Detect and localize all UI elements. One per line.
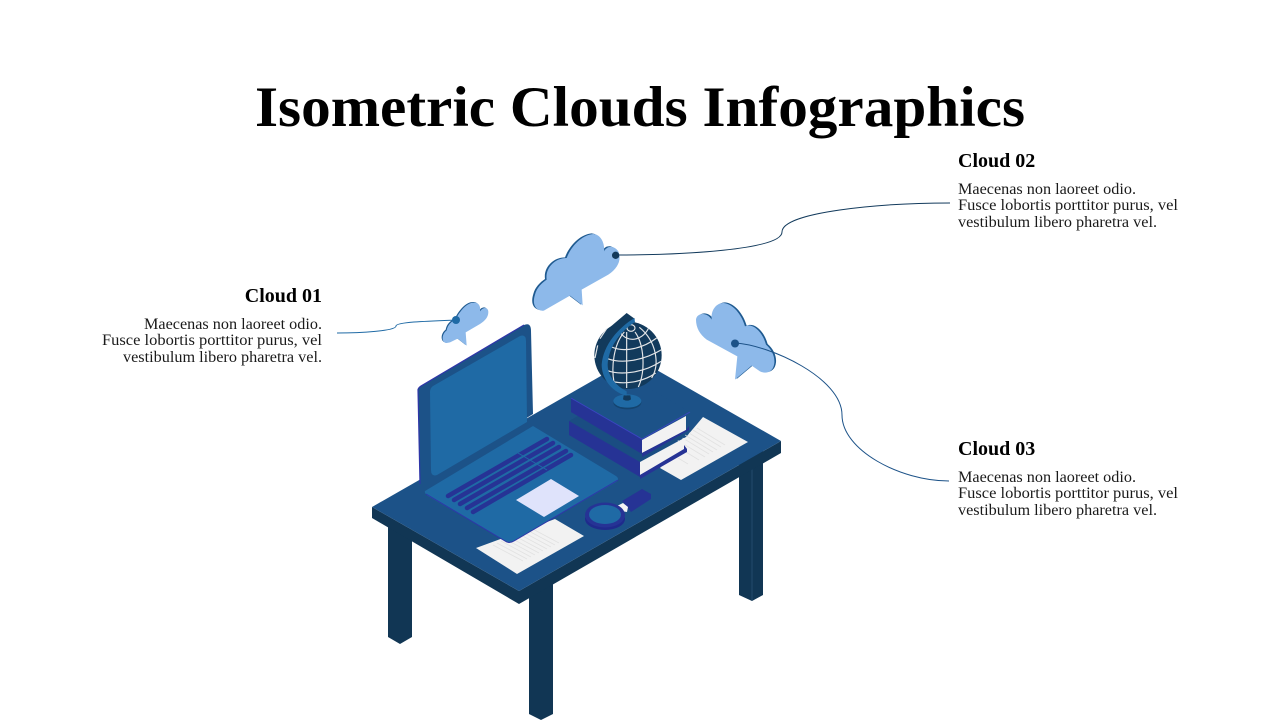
books (569, 371, 690, 479)
magnifier (585, 489, 651, 530)
text block: cloud 01: Fusce lobortis porttitor purus, vel (102, 332, 322, 349)
text block: cloud 03: Maecenas non laoreet odio. (958, 469, 1136, 486)
touchpad (516, 479, 579, 517)
desk left leg (388, 518, 412, 644)
desk front leg (529, 580, 553, 720)
text block: cloud 03: vestibulum libero pharetra vel. (958, 502, 1157, 519)
text block: cloud 03: Cloud 03 (958, 438, 1035, 460)
globe (594, 313, 662, 409)
laptop base (425, 426, 618, 542)
text block: cloud 01 (102, 285, 322, 366)
cloud 2 (532, 233, 620, 311)
text block: cloud 01: vestibulum libero pharetra vel. (123, 349, 322, 366)
desk top (372, 357, 781, 591)
title: Isometric Clouds Infographics (255, 76, 1025, 139)
text block: cloud 02: Cloud 02 (958, 150, 1035, 172)
text block: cloud 02: vestibulum libero pharetra vel. (958, 214, 1157, 231)
upper book (571, 371, 690, 457)
text block: cloud 03 (958, 438, 1178, 519)
text block: cloud 03: Fusce lobortis porttitor purus, vel (958, 485, 1178, 502)
cloud 3 (696, 302, 776, 380)
keyboard (448, 439, 571, 512)
laptop (418, 324, 618, 542)
text block: cloud 02: Maecenas non laoreet odio. (958, 181, 1136, 198)
laptop screen (418, 324, 533, 484)
globe grid (595, 325, 662, 388)
magnifier handle (622, 489, 651, 512)
connector: cloud 1 (337, 320, 456, 333)
connector: cloud 2 (616, 203, 950, 255)
desk back right leg (739, 448, 763, 601)
lower book (569, 394, 687, 479)
globe stand arc (602, 318, 635, 396)
globe sphere (594, 313, 662, 389)
desk side edge (372, 441, 781, 604)
paper: right (660, 417, 748, 480)
magnifier lens (585, 508, 625, 530)
globe base (613, 394, 641, 409)
text block: cloud 02 (958, 150, 1178, 231)
text block: cloud 01: Cloud 01 (245, 285, 322, 307)
text block: cloud 01: Maecenas non laoreet odio. (144, 316, 322, 333)
text block: cloud 02: Fusce lobortis porttitor purus, vel (958, 197, 1178, 214)
desk (372, 357, 781, 720)
paper: front (476, 519, 584, 574)
connector: cloud 3 (731, 340, 949, 481)
cloud 1 (442, 302, 488, 346)
